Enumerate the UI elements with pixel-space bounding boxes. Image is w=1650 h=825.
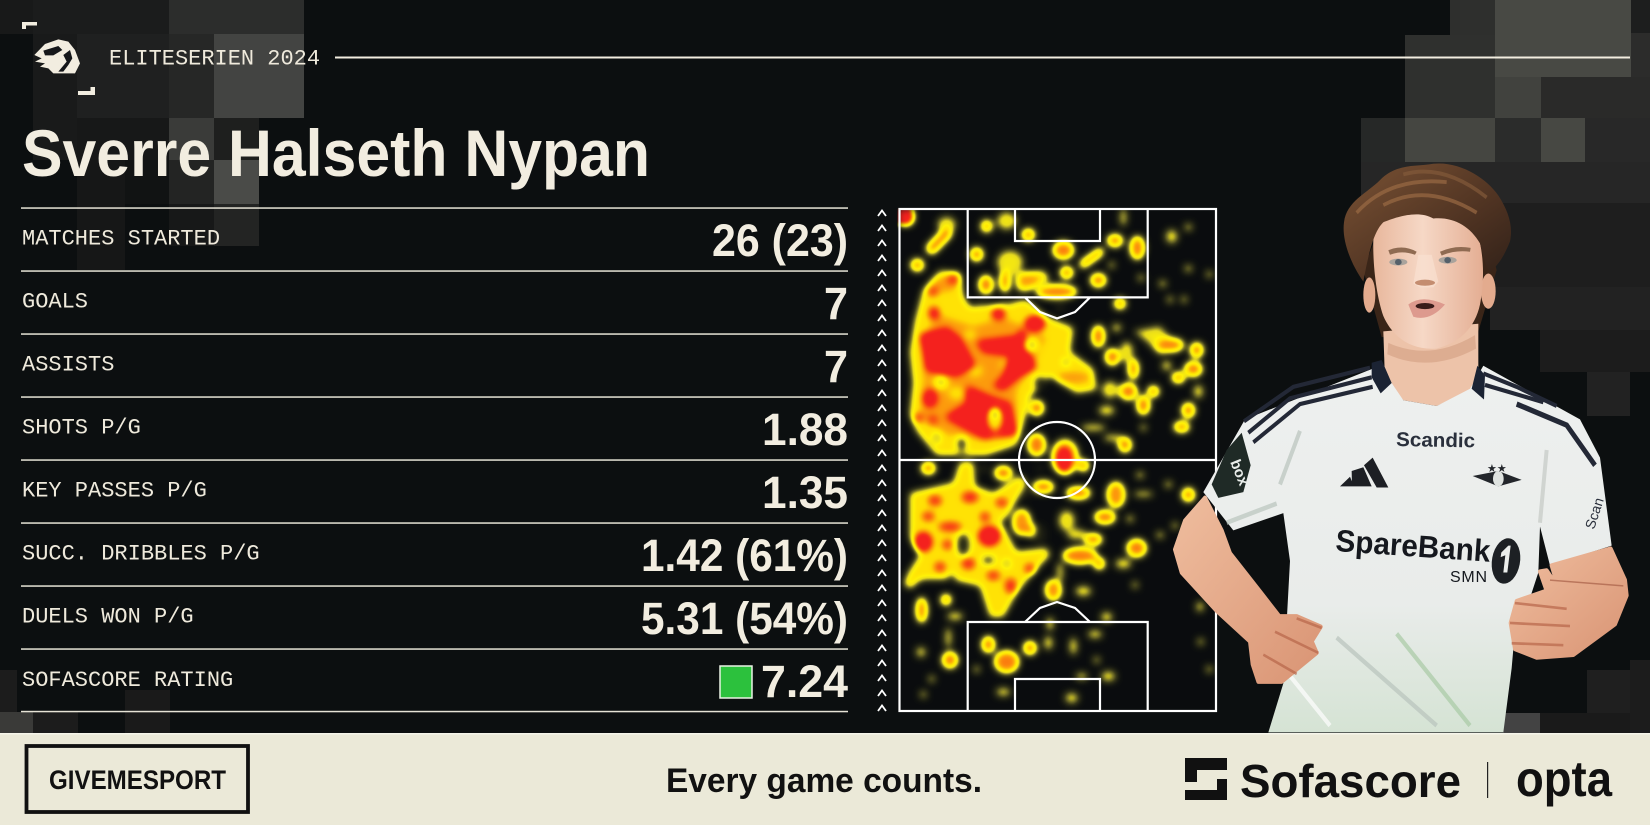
direction of play chevrons <box>877 209 887 714</box>
tagline: Every game counts. <box>666 762 982 800</box>
collar <box>1372 360 1485 399</box>
row: successful dribbles per game: 1.42 (61%) <box>641 530 848 581</box>
brows <box>1388 247 1471 256</box>
shirt <box>1203 366 1612 732</box>
neck <box>1383 324 1478 406</box>
row: matches started <box>22 215 848 266</box>
row: sofascore rating: SOFASCORE RATING <box>22 668 233 693</box>
row: duels won per game: DUELS WON P/G <box>22 604 194 630</box>
title: player name: Sverre Halseth Nypan <box>22 116 650 190</box>
league heading: ELITESERIEN 2024 <box>109 46 320 72</box>
row: key passes per game: 1.35 <box>762 467 848 518</box>
row: goals: 7 <box>824 278 848 329</box>
row: goals: GOALS <box>22 290 88 314</box>
left arm and hand <box>1175 498 1321 682</box>
heatmap <box>898 209 1216 711</box>
row: key passes per game: KEY PASSES P/G <box>22 478 207 504</box>
league logo with corner brackets <box>22 22 95 95</box>
row: sofascore rating <box>22 656 848 707</box>
row: assists <box>22 341 848 392</box>
footer band <box>0 733 1650 825</box>
nose <box>1413 255 1438 287</box>
hair back <box>1363 217 1497 337</box>
row: matches started: MATCHES STARTED <box>22 226 220 252</box>
row: sofascore rating: 7.24 <box>761 656 848 707</box>
row: successful dribbles per game <box>22 530 848 581</box>
sleeve patch <box>1212 433 1251 498</box>
row: shots per game <box>22 404 848 455</box>
header rule <box>335 56 1630 58</box>
GiveMeSport logo: GIVEMESPORT <box>49 765 226 795</box>
sponsor: Scandic: Scandic <box>1396 429 1475 452</box>
row: duels won per game: 5.31 (54%) <box>641 593 848 644</box>
row: goals <box>22 278 848 329</box>
row: shots per game: SHOTS P/G <box>22 416 141 440</box>
right arm and hand <box>1511 549 1627 657</box>
player photo illustration <box>1175 163 1627 732</box>
sponsor: SpareBank: SpareBank <box>1335 523 1492 569</box>
right hand fingers <box>1510 580 1623 645</box>
hair <box>1344 163 1511 282</box>
left hand fingers <box>1263 618 1322 674</box>
logo separator <box>1487 762 1488 798</box>
GiveMeSport logo <box>26 746 248 812</box>
row: assists: 7 <box>824 341 848 392</box>
row: key passes per game <box>22 467 848 518</box>
Sofascore icon <box>1185 758 1227 800</box>
mouth <box>1408 299 1445 318</box>
row: shots per game: 1.88 <box>762 404 848 455</box>
sleeve sponsor: Scan <box>1582 496 1607 531</box>
sponsor: SMN: SMN <box>1450 569 1487 586</box>
row: assists: ASSISTS <box>22 352 114 378</box>
stats table <box>21 207 848 712</box>
Sofascore wordmark: Sofascore <box>1240 755 1461 807</box>
row: matches started: 26 (23) <box>712 215 848 266</box>
shirt folds <box>1227 431 1547 726</box>
shoulder stripes <box>1244 368 1595 465</box>
pitch lines <box>900 209 1216 711</box>
sleeve text: box <box>1226 457 1252 489</box>
Opta wordmark: opta <box>1516 751 1613 807</box>
adidas logo <box>1340 458 1388 487</box>
ears <box>1363 277 1375 313</box>
crest <box>1473 471 1522 486</box>
sponsor badge <box>1488 535 1524 587</box>
face <box>1373 214 1483 349</box>
crest stars: ★★ <box>1487 463 1507 475</box>
row: duels won per game <box>22 593 848 644</box>
row: successful dribbles per game: SUCC. DRIBBLES P/G <box>22 542 260 566</box>
eyes <box>1389 259 1407 266</box>
